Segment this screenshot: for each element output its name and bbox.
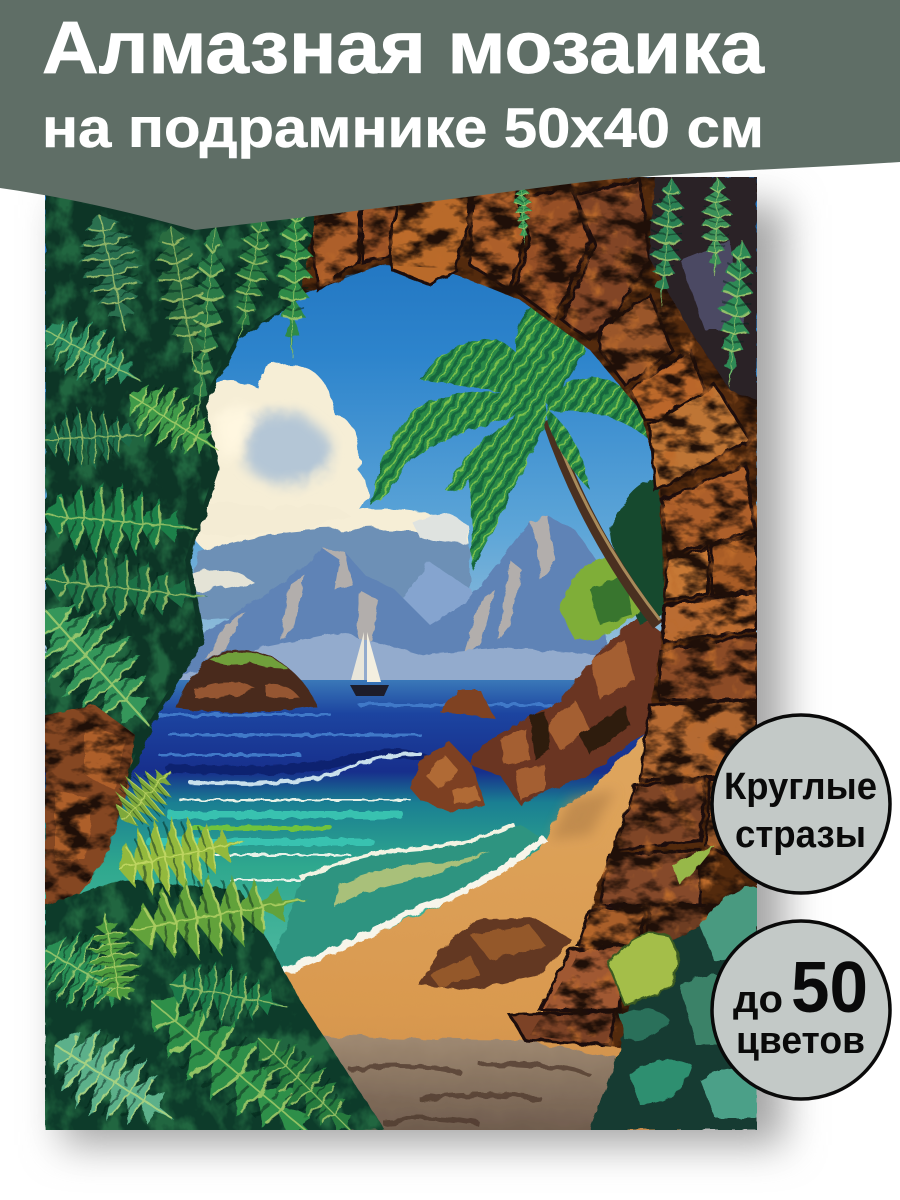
shoreline rocks [410,615,670,812]
badge: round rhinestones [712,715,890,893]
palm tree [370,305,660,625]
badge: round rhinestones: Круглые [724,766,877,808]
sand beach [255,730,680,1135]
stone arch [301,177,757,1048]
sea waves [150,705,560,880]
sky [45,177,757,687]
top banner [0,0,900,230]
foreground beach boulders [418,918,572,990]
badge: round rhinestones: стразы [735,814,866,856]
top right dark stone and vines [513,177,759,400]
clouds [188,362,470,620]
subtitle: на подрамнике 50х40 см [42,96,764,159]
badge: up to 50 colours [712,921,890,1099]
distant mountains [165,516,610,682]
left rock wall [45,705,135,910]
bottom left ferns [45,769,384,1130]
badge: up to 50 colours: цветов [736,1020,865,1062]
painting: tropical beach through a stone arch [10,177,759,1178]
shore wave and foam [258,825,545,982]
palm fronds [370,305,652,570]
stone texture [300,177,757,1050]
canvas shadow [62,205,784,1145]
title: Алмазная мозаика [42,6,765,89]
sailboat [350,632,389,696]
wet sand foreground [318,1035,620,1135]
badge: up to 50 colours: до [733,979,783,1021]
badge: up to 50 colours: 50 [791,948,868,1028]
bottom right tropical leaves [590,845,757,1130]
island [176,649,316,713]
sea [45,680,645,996]
bushes behind the palm [560,478,675,641]
shadow on sand under the rocks [550,790,615,840]
left jungle foliage [45,195,314,782]
arch blocks [310,180,757,1045]
